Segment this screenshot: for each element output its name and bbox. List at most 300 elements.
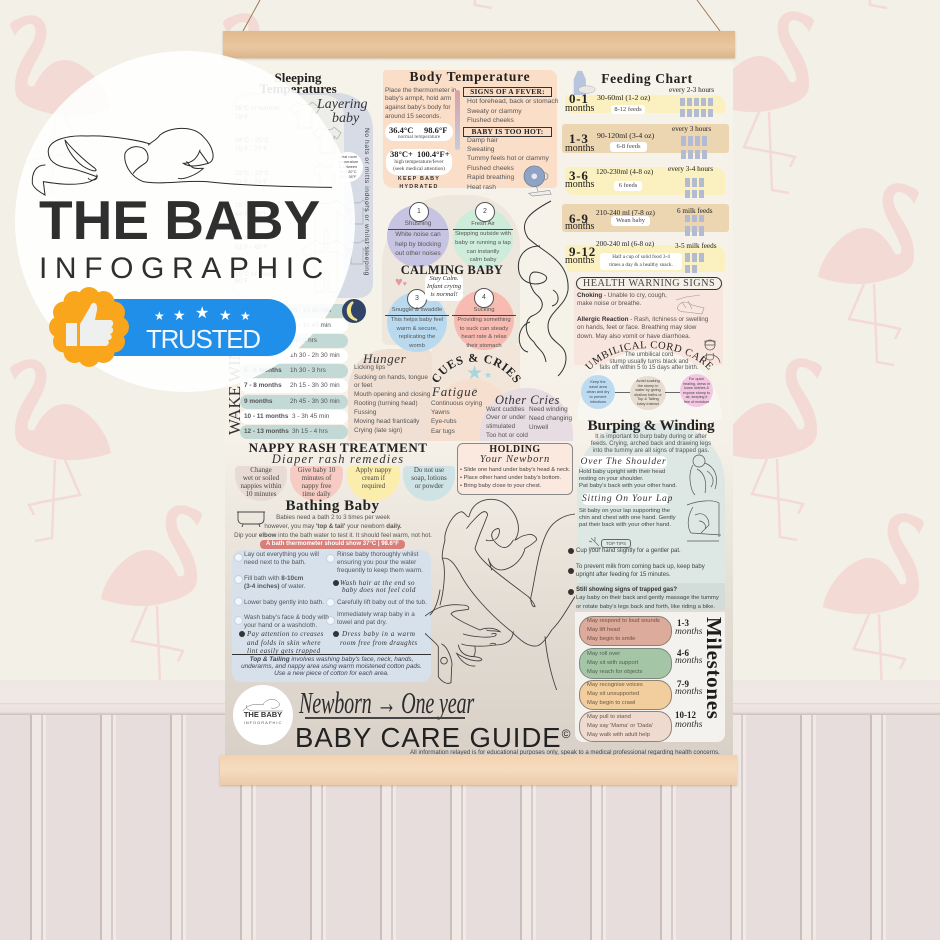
other cries list 1 (486, 406, 528, 439)
circle: avoid soaking: the stump in (638, 384, 658, 388)
text: allergic reaction (577, 316, 708, 340)
shape: nappy free time: Give baby 10 (298, 466, 335, 474)
text: umbilical intro (575, 352, 723, 374)
circle: keep clean (581, 375, 615, 409)
row: seven to eight months (240, 379, 348, 393)
too hot list: Sweating (467, 146, 495, 153)
instruction text: Place the thermometer in (385, 87, 456, 94)
fatigue list: Yawns (431, 409, 450, 416)
fatigue list (431, 400, 482, 435)
too hot list: Tummy feels hot or clammy (467, 155, 549, 162)
text: sucking (452, 307, 516, 349)
bullets: • Place other hand under baby's bottom. (460, 475, 561, 481)
other cries background (480, 388, 573, 441)
instruction text: around 15 seconds. (385, 113, 441, 120)
connector lines (615, 392, 680, 393)
high temperature pill (386, 149, 452, 175)
underline (305, 717, 465, 718)
steps right column: towel and pat dry. (337, 619, 387, 626)
other cries list 1: stimulated (486, 423, 515, 430)
shape: no soap: soap, lotions (411, 474, 447, 482)
panel: cues and cries (348, 345, 573, 441)
panel: wake windows (225, 298, 348, 439)
hunger list: Rooting (turning head) (354, 400, 418, 407)
icon: fan (524, 166, 552, 196)
text: sucking: to suck can steady (460, 326, 508, 332)
text: allergic reaction: Allergic Reaction - Rash, itchiness or swelling (577, 316, 708, 323)
row: twelve to thirteen months: 12 - 13 months (244, 428, 289, 435)
text: sitting on your lap: Sit baby on your lap supporting the (579, 508, 670, 514)
text: sucking: Sucking (474, 307, 494, 313)
steps right column: Immediately wrap baby in a (337, 611, 415, 618)
circle: quick healing: air, keeping it (686, 395, 707, 399)
script: hunger: Hunger (363, 351, 406, 366)
icon: moon (342, 299, 366, 323)
text: sucking: heart rate & relax (461, 334, 507, 340)
steps left column: your hand or a washcloth. (244, 622, 317, 629)
text: sitting on your lap: pat their back with your other hand. (579, 522, 671, 528)
text: snuggle: This helps baby feel (391, 317, 443, 323)
row: five to six months: 5 - 6 months (244, 367, 282, 374)
row: 3-6 months: months (565, 179, 594, 190)
number 3 (407, 289, 427, 309)
row: 9-12 months: months (565, 255, 594, 266)
too hot list: Heat rash (467, 184, 496, 191)
row: twelve to thirteen months (240, 425, 348, 439)
icon: baby on lap (683, 497, 723, 543)
milestone 7-9 months: May recognise voices (587, 682, 643, 688)
text: umbilical intro: The umbilical cord (625, 352, 673, 358)
icon: stars (466, 363, 492, 394)
row: fourth (240, 349, 348, 363)
text: shushing: White noise can (395, 231, 441, 238)
arch: layering background (232, 93, 373, 298)
text: bath intro (233, 513, 433, 539)
heading: nappy rash: NAPPY RASH TREATMENT (249, 440, 427, 455)
row: third: 3 months (244, 337, 272, 344)
row: 0-1 months: months (565, 103, 594, 114)
note: ideal room temperature (333, 152, 363, 182)
steps left column: Pay attention to creases (247, 630, 324, 638)
script: your newborn: Your Newborn (480, 454, 550, 465)
circle: avoid soaking: Avoid soaking (636, 379, 660, 383)
milestone 7-9 months (579, 680, 724, 711)
heading: health warning signs: HEALTH WARNING SIGNS (583, 278, 715, 289)
hunger list: or feet (354, 382, 372, 389)
vertical heading: milestones: Milestones (702, 617, 726, 720)
heading: holding: HOLDING (489, 444, 541, 455)
row: second (240, 319, 348, 333)
temperature list: 71°F - 74°F (235, 179, 268, 186)
steps right column: frequently to keep them warm. (337, 567, 423, 574)
row: 9-12 months (565, 240, 725, 273)
milestone 1-3 months: May lift head (587, 627, 620, 633)
milestone 4-6 months: May sit with support (587, 660, 638, 666)
tips text: Still showing signs of trapped gas? (576, 587, 677, 593)
temperature list: 75°F - 77°F (235, 146, 268, 153)
icon: hearts: ♥♥ (395, 274, 407, 289)
stars: ★ (240, 309, 251, 323)
high temperature pill: (seek medical attention) (393, 166, 445, 172)
row: first (240, 304, 348, 318)
fatigue background (430, 379, 514, 441)
too hot list: Damp hair (467, 137, 498, 144)
shape: change nappies (235, 466, 287, 501)
other cries list 2: Unwell (529, 424, 548, 431)
text: fresh air: calm baby (470, 257, 496, 263)
row: third (240, 334, 348, 348)
poster background (225, 58, 733, 755)
temperature list: 64°F - 70°F (235, 211, 268, 218)
shape: change nappies: 10 minutes (246, 490, 276, 498)
stars (146, 304, 256, 324)
panel: calming baby (382, 195, 520, 352)
top wooden bar (223, 31, 735, 58)
bullets: • Bring baby close to your chest. (460, 483, 541, 489)
panel: feeding chart (562, 70, 729, 273)
text: bath intro: however, you may 'top & tail' your newborn daily. (264, 523, 402, 530)
keep baby hydrated: KEEP BABY (398, 176, 440, 182)
row: 1-3 months: 90-120ml (3-4 oz) (597, 131, 654, 140)
text: sitting on your lap: chin and chest with one hand. Gently (579, 515, 676, 521)
temperature list: 26°C or warmer (235, 105, 280, 112)
arched heading: cues and cries: CUES & CRIES (432, 354, 521, 382)
arch: temperature background (232, 95, 344, 298)
row: five to six months: 1h 30 - 3 hrs (290, 367, 326, 374)
stars: ★ (219, 307, 232, 323)
number 4 (474, 288, 494, 308)
milestone 4-6 months: May roll over (587, 651, 620, 657)
tips text: or rotate baby's legs back and forth, like riding a bike. (576, 604, 715, 610)
milestone 4-6 months: 4-6 (677, 648, 689, 658)
hunger list: Crying (late sign) (354, 427, 402, 434)
text: sucking: Providing something (457, 317, 511, 323)
circle: quick healing: For quick (689, 377, 704, 381)
row: 9-12 months: 9-12 (569, 244, 596, 259)
row: 1-3 months: months (565, 143, 594, 154)
steps left column: (3-4 inches) of water. (244, 583, 305, 590)
line art: mother holding baby (425, 490, 575, 690)
instruction text: baby's armpit, hold arm (385, 95, 451, 102)
hunger background (348, 349, 432, 441)
steps right column: Rinse baby thoroughly whilst (337, 551, 418, 558)
text: choking (577, 292, 667, 307)
text: umbilical intro: stump usually turns black and (609, 359, 689, 365)
circle: keep clean: clean and dry (587, 390, 609, 394)
tips text: upright after feeding for 15 minutes. (576, 572, 671, 578)
row: 0-1 months: every 2-3 hours (669, 86, 714, 94)
keep baby hydrated: HYDRATED (399, 184, 439, 190)
note: stay calm (425, 275, 463, 301)
shape: nappy free time: nappy free (302, 482, 331, 490)
too hot list: Rapid breathing (467, 174, 514, 181)
temperature list: 16°C - 17°C (235, 235, 269, 242)
text: shushing: Shushing (405, 220, 431, 227)
text: shushing (388, 220, 448, 257)
icon: bottle (574, 70, 596, 95)
panel: holding your newborn (457, 443, 573, 495)
shape: nappy free time: minutes of (302, 474, 331, 482)
milestone 1-3 months: May begin to smile (587, 636, 635, 642)
hunger list: Licking lips (354, 364, 385, 371)
row: 1-3 months (562, 124, 729, 159)
row: 6-9 months (562, 204, 729, 236)
baby is too hot box: BABY IS TOO HOT: (471, 127, 544, 136)
row: 3-6 months: 120-230ml (4-8 oz) (596, 167, 653, 176)
text: fresh air: baby or running a tap (455, 240, 511, 246)
text: sitting on your lap (579, 508, 689, 531)
high temperature pill: 38°C+ (390, 149, 413, 159)
box background (457, 443, 573, 495)
stars: ★ (195, 305, 209, 322)
other cries list 1: Over or under (486, 414, 525, 421)
vertical note: no hats: No hats or mitts indoors or whilst sleeping (363, 128, 370, 276)
normal temperature pill: 36.4°C (389, 125, 413, 135)
row: 1-3 months: every 3 hours (672, 125, 711, 133)
note: stay calm: is normal! (430, 291, 458, 298)
shape: nappy free time (290, 466, 343, 501)
footer logo text: THE BABY (244, 710, 282, 719)
other cries list 1: Want cuddles (486, 406, 524, 413)
trusted text: TRUSTED (146, 324, 260, 354)
milestone 10-12 months: May pull to stand (587, 714, 631, 720)
temperature list: 78°F (235, 114, 249, 121)
bullets: • Slide one hand under baby's head & neck. (460, 467, 570, 473)
heading: body temperature: Body Temperature (410, 69, 530, 84)
steps left column: Fill bath with 8-10cm (244, 575, 303, 582)
circle: quick healing: expose stump to (683, 391, 710, 395)
fatigue list: Eye-rubs (431, 418, 457, 425)
beige backdrop (432, 345, 520, 441)
text: bath intro: Babies need a bath 2 to 3 times per week (276, 514, 390, 521)
fever signs list: Hot forehead, back or stomach (467, 98, 558, 105)
icon: baby on shoulder (685, 453, 723, 495)
row: first: 0 - 1 month (244, 307, 278, 314)
number 3: 3 (415, 295, 419, 302)
text: over the shoulder (579, 469, 689, 492)
row: 1-3 months: 6-8 feeds (616, 143, 640, 150)
text: snuggle (385, 307, 449, 349)
steps right column: Wash hair at the end so (340, 579, 415, 587)
arch background (577, 423, 725, 610)
row: 0-1 months: 8-12 feeds (614, 106, 642, 113)
heading: sleeping temperatures: Sleeping (275, 70, 321, 85)
row: second: 1h - 1h 45 min (290, 322, 331, 329)
text: over the shoulder: resting on your shoulder. (579, 476, 644, 482)
row: 9-12 months: Half a cup of solid food 3-4 (612, 254, 670, 260)
milestone 10-12 months (579, 711, 724, 742)
fever signs list: Flushed cheeks (467, 117, 514, 124)
milestone 7-9 months: May begin to crawl (587, 700, 635, 706)
heading: burping and winding: Burping & Winding (588, 417, 714, 434)
stars: ★ (154, 309, 165, 323)
icon: bath tub (235, 510, 267, 527)
row: 6-9 months: 6 milk feeds (677, 207, 713, 215)
other cries list 1: Too hot or cold (486, 432, 528, 439)
milestone 4-6 months: months (675, 656, 702, 666)
text: burp intro: feeds. Crying, arched back and drawing legs (591, 440, 711, 447)
too hot list (467, 137, 549, 191)
row: 9-12 months: 3-5 milk feeds (675, 242, 717, 250)
text: over the shoulder: Hold baby upright with their head (579, 469, 665, 475)
script: diaper rash remedies: Diaper rash remedies (272, 452, 404, 466)
text: fresh air: Stepping outside with (455, 231, 511, 237)
line art: sleeping baby (0, 0, 380, 400)
row: 3-6 months (565, 165, 725, 198)
note: ideal room temperature: Ideal room (339, 155, 357, 159)
label: over the shoulder: Over The Shoulder (581, 457, 666, 467)
shape: nappy cream (347, 466, 400, 501)
footer logo (233, 685, 293, 745)
icon: thermometer (455, 90, 460, 150)
row: seven to eight months: 7 - 8 months (244, 382, 282, 389)
icon: choking hand (676, 294, 704, 314)
panel: milestones (575, 612, 726, 743)
script: fatigue: Fatigue (432, 384, 478, 399)
steps right column: room free from draughts (340, 639, 417, 647)
text: umbilical intro: falls off within 5 to 15 days after birth. (600, 365, 698, 371)
label: sitting on your lap: Sitting On Your Lap (582, 494, 673, 504)
steps right column: Carefully lift baby out of the tub. (337, 599, 427, 606)
steps right column: Dress baby in a warm (342, 630, 416, 638)
signs of a fever box: SIGNS OF A FEVER: (470, 87, 545, 96)
footer logo subtext: INFOGRAPHIC (244, 720, 282, 725)
text: burp intro: into the tummy are all signs of trapped gas. (593, 447, 709, 454)
other cries list 2: Need winding (529, 406, 568, 413)
steps left column: Wash baby's face & body with (244, 614, 329, 621)
keep baby hydrated (398, 176, 440, 190)
circle: shushing (387, 205, 449, 267)
temperature list: 15°C or below (235, 271, 275, 278)
blue panel (232, 550, 431, 682)
heading: bathing baby: Bathing Baby (286, 498, 379, 514)
milestone 7-9 months: 7-9 (677, 679, 689, 689)
title: baby care guide: BABY CARE GUIDE© (295, 722, 570, 753)
row: nine months (240, 395, 348, 409)
text: shushing: help by blocking (395, 240, 441, 248)
hanging string (242, 0, 720, 31)
steps right column: baby does not feel cold (342, 586, 416, 594)
row: 9-12 months: times a day & a healthy snack. (609, 262, 673, 268)
arch background (577, 350, 722, 420)
tips text: Lay baby on their back and gently massage the tummy (576, 595, 719, 601)
shape: nappy free time: time daily (302, 490, 331, 498)
row: nine months: 9 months (244, 398, 272, 405)
milestone 10-12 months: May walk with adult help (587, 732, 650, 738)
text: allergic reaction: on hands, feet or face. Breathing may slow (577, 324, 696, 331)
circle: quick healing: free of moisture (684, 400, 709, 404)
script title: newborn to one year: Newborn → One year (299, 685, 474, 720)
text: fresh air (453, 221, 513, 263)
icon: stars: ★ (466, 363, 483, 384)
circle: avoid soaking: shallow baths or (634, 393, 662, 397)
row: twelve to thirteen months: 3h 15 - 4 hrs (292, 428, 328, 435)
other cries list 2: Need changing (529, 415, 572, 422)
row: fourth: 1h 30 - 2h 30 min (290, 352, 340, 359)
note: ideal room temperature: 16 & 20°C (339, 170, 357, 174)
text: fresh air: Fresh Air (471, 221, 495, 227)
panel: sleeping temperatures (235, 70, 373, 298)
footer logo baby (241, 697, 285, 713)
row: five to six months (240, 364, 348, 378)
circle: snuggle (387, 292, 447, 352)
panel: umbilical cord care (577, 341, 722, 420)
top and tailing text: underarms, and nappy area using warm moistened cotton pads. (241, 663, 422, 670)
row: 6-9 months: 210-240 ml (7-8 oz) (596, 208, 655, 217)
line art: fetus (508, 195, 574, 380)
text: burp intro (575, 433, 727, 455)
circle: keep clean: Keep the (590, 380, 606, 384)
normal temperature pill: 98.6°F (424, 125, 447, 135)
steps left column: and folds in skin where (247, 639, 321, 647)
milestone 7-9 months: months (675, 687, 702, 697)
text: snuggle: replicating the (399, 334, 435, 340)
shape: change nappies: wet or soiled (243, 474, 279, 482)
temperature list (235, 105, 280, 285)
row: 9-12 months: 200-240 ml (6-8 oz) (596, 240, 654, 248)
icon: top tips: TOP TIPS (606, 541, 626, 546)
logo title: the baby: THE BABY (39, 189, 320, 251)
top and tailing text: Use a new piece of cotton for each area. (274, 670, 389, 677)
circle: avoid soaking: water by giving (635, 388, 661, 392)
row: 3-6 months: 3-6 (569, 168, 589, 183)
row: ten to eleven months: 3 - 3h 45 min (292, 413, 329, 420)
bottom wooden bar (220, 755, 737, 785)
wallpaper with flamingo pattern (10, 0, 924, 680)
text: fresh air: can instantly (467, 249, 499, 255)
panel: burping and winding (570, 415, 727, 612)
steps left column: need next to the bath. (244, 559, 306, 566)
circle: avoid soaking: baby instead (637, 402, 659, 406)
logo subtitle: infographic: INFOGRAPHIC (39, 252, 331, 285)
row: second: 2 months (244, 322, 272, 329)
panel: body temperature (383, 69, 558, 196)
icon: stars: ★ (484, 370, 492, 380)
milestone 4-6 months: May reach for objects (587, 669, 642, 675)
circle: avoid soaking: Top & Tailing (637, 397, 659, 401)
text: snuggle: womb (409, 343, 425, 349)
row: 3-6 months: every 3-4 hours (668, 165, 713, 173)
icon: clothing layers (308, 102, 370, 264)
row: seven to eight months: 2h 15 - 3h 30 min (290, 382, 340, 389)
stars: ★ (173, 307, 186, 323)
steps left column (244, 551, 336, 651)
trusted badge (48, 286, 298, 368)
wainscot panelling (0, 680, 940, 940)
icon: thumbs up seal (48, 286, 132, 370)
number 1 (409, 202, 429, 222)
row: third: 1h - 2 hrs (290, 337, 317, 344)
brush background (383, 70, 557, 188)
milestone 4-6 months (579, 648, 724, 679)
row: 6-9 months: 6-9 (569, 211, 589, 226)
callout: bath thermometer: A bath thermometer should show 37°C | 98.6°F (266, 541, 399, 547)
row: 3-6 months: 6 feeds (619, 182, 637, 189)
row: fourth: 4 months (244, 352, 272, 359)
white logo circle (15, 51, 355, 392)
milestone 1-3 months (579, 616, 724, 645)
row: nine months: 2h 45 - 3h 30 min (290, 398, 340, 405)
icon: doctor (700, 340, 720, 363)
script: other cries: Other Cries (495, 393, 560, 407)
text: shushing: out other noises (395, 250, 441, 257)
shape: no soap: or powder (415, 482, 443, 490)
shape: change nappies: nappies within (240, 482, 282, 490)
panel: bathing baby (230, 497, 435, 683)
shape: nappy cream: Apply nappy (355, 466, 392, 474)
vertical heading: wake windows: WAKE WINDOWS (225, 298, 244, 435)
instruction text (385, 87, 456, 120)
